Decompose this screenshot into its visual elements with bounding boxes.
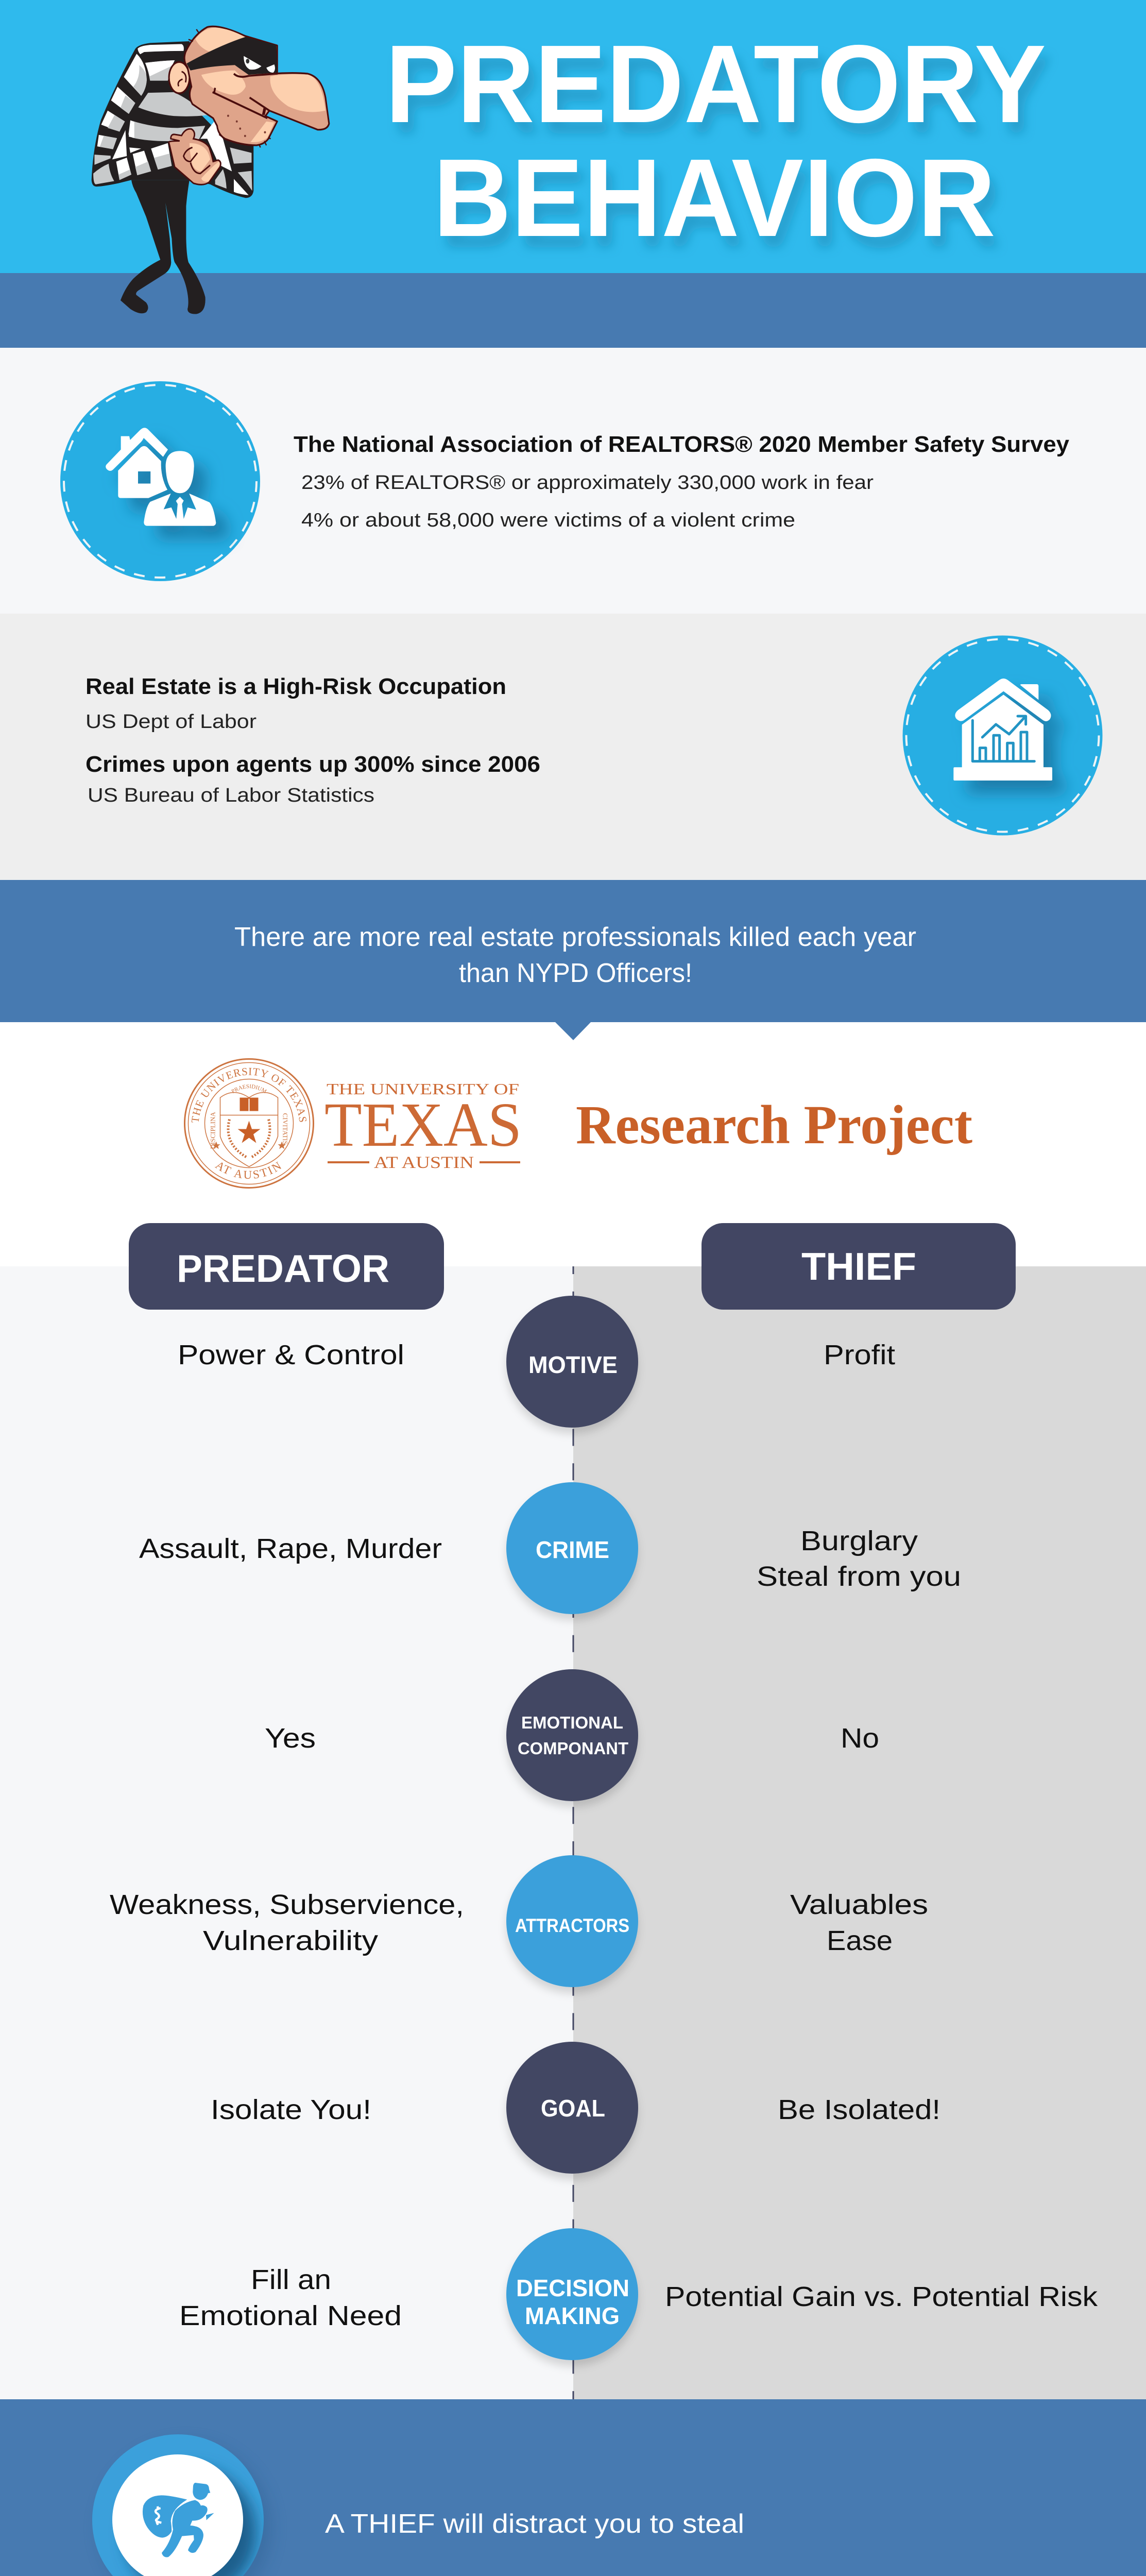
row: crime: CRIME [536,1536,609,1563]
column heading: predator: PREDATOR [177,1247,389,1290]
icon: house with rising chart badge [902,636,1102,836]
hand [169,129,220,184]
source: dept of labor: US Dept of Labor [85,711,256,733]
comparison table [0,1223,1146,2399]
row: crime: Assault, Rape, Murder [139,1533,442,1564]
panel: high-risk occupation [0,614,1146,880]
header panel [0,0,1146,348]
row: motive: Profit [824,1340,895,1370]
mask [186,37,277,75]
university seal: DISCIPLINA [209,1112,216,1149]
row: motive [178,1296,895,1428]
banner: killed each year: than NYPD Officers! [459,958,692,988]
row: decision making: Potential Gain vs. Potential Risk [665,2281,1098,2312]
title: BEHAVIOR [433,135,996,260]
row: crime: Steal from you [757,1561,961,1592]
illustration: masked burglar [92,26,329,314]
row: attractors: Weakness, Subservience, [110,1889,464,1920]
ear [169,62,190,93]
row: emotional component: EMOTIONAL [521,1713,623,1732]
row: goal: GOAL [541,2095,605,2122]
university seal: AT AUSTIN [214,1161,281,1179]
survey heading: The National Association of REALTORS® 2020 Member Safety Survey [294,432,1070,457]
banner: killed each year: There are more real estate professionals killed each year [234,922,916,952]
row: emotional component [265,1669,879,1801]
survey stat: violent crime: 4% or about 58,000 were victims of a violent crime [301,510,795,531]
source: bureau of labor statistics: US Bureau of Labor Statistics [88,785,374,806]
row: attractors: Vulnerability [203,1925,378,1956]
row: decision making [179,2228,1098,2360]
crimes heading: Crimes upon agents up 300% since 2006 [85,752,540,777]
row: goal [211,2042,940,2174]
face [184,26,329,145]
banner: killed each year [0,880,1146,1040]
row: motive: MOTIVE [528,1351,618,1378]
row: attractors: ATTRACTORS [515,1915,629,1936]
panel: NAR survey [0,348,1146,614]
row: goal: Be Isolated! [778,2094,940,2125]
row: crime [139,1482,961,1614]
survey stat: work in fear: 23% of REALTORS® or approximately 330,000 work in fear [301,472,874,494]
column heading: thief [702,1223,1016,1310]
row: attractors [110,1855,928,1987]
panel: thief versus predator advice [0,2399,1146,2576]
high-risk heading: Real Estate is a High-Risk Occupation [85,674,506,699]
row: emotional component: No [841,1723,879,1754]
logo: University of Texas at Austin [184,1058,522,1189]
university seal: CIVITATIS [281,1113,289,1145]
row: emotional component: Yes [265,1723,316,1754]
row: motive: Power & Control [178,1340,404,1370]
row: crime: Burglary [800,1526,918,1556]
row: decision making: DECISION [516,2275,629,2301]
row: decision making: MAKING [525,2302,620,2329]
row: attractors: Ease [827,1925,893,1956]
title [385,22,1046,260]
row: decision making: Fill an [251,2264,331,2295]
icon: agent and house badge [60,381,260,581]
university seal: THE UNIVERSITY OF TEXAS [192,1067,306,1123]
heading: research project: Research Project [576,1095,972,1156]
logo: University of Texas at Austin: THE UNIVERSITY OF [327,1080,519,1098]
statement: thief: A THIEF will distract you to steal [325,2509,744,2539]
logo: University of Texas at Austin: AT AUSTIN [374,1154,474,1172]
university seal: PRAESIDIUM [231,1084,267,1093]
logo: University of Texas at Austin: TEXAS [324,1090,522,1160]
column heading: thief: THIEF [801,1245,916,1288]
university seal [184,1058,314,1189]
icon: thief with money bag [92,2434,271,2576]
title: PREDATORY [385,22,1046,146]
row: goal: Isolate You! [211,2094,371,2125]
row: attractors: Valuables [790,1889,928,1920]
row: decision making: Emotional Need [179,2300,402,2331]
column heading: predator [129,1223,444,1310]
row: emotional component: COMPONANT [518,1739,628,1758]
